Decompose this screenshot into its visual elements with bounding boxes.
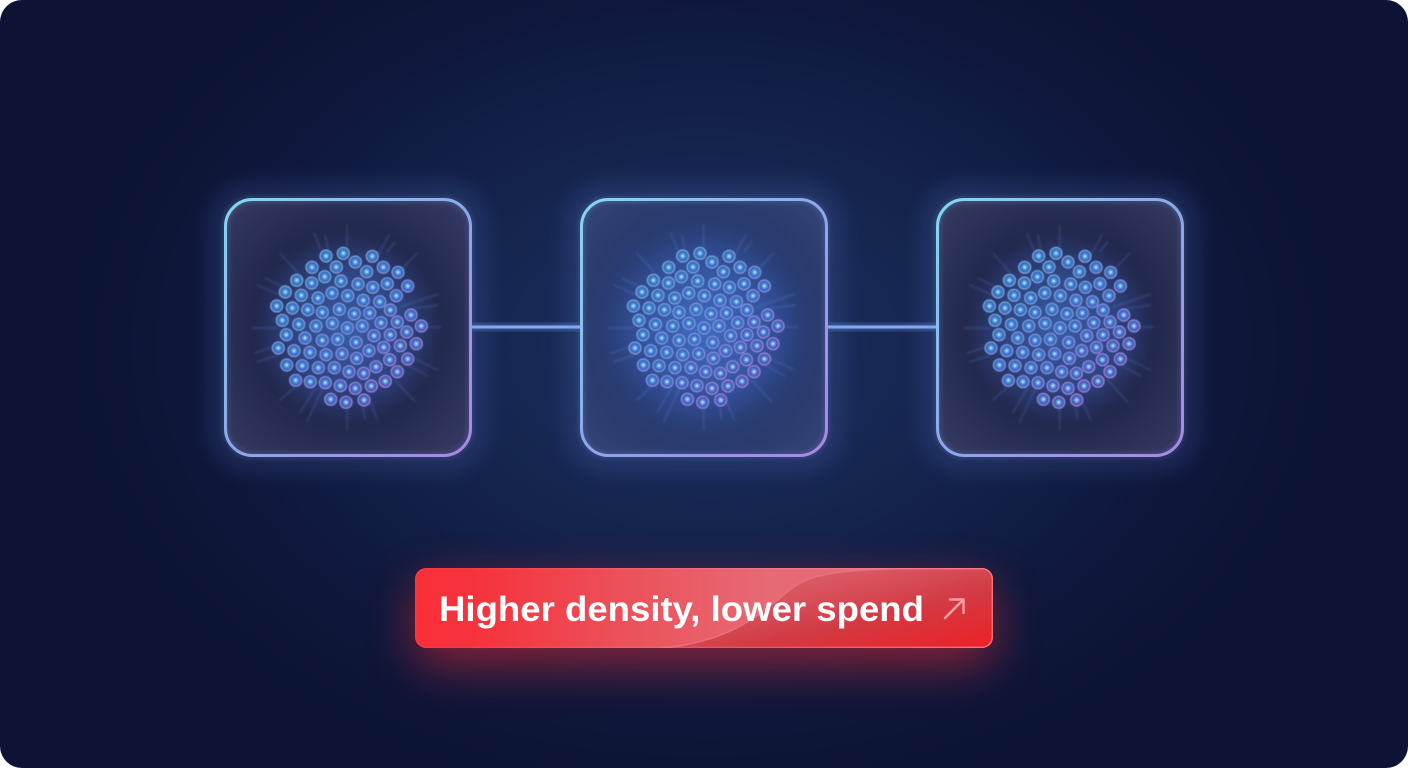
callout glow <box>415 585 993 665</box>
connector: panel 1 to panel 2 <box>472 324 580 330</box>
panel: cluster 2 <box>574 192 834 463</box>
panel: cluster 3 <box>930 192 1190 463</box>
icon: up-right arrow <box>945 600 964 618</box>
connector: panel 2 to panel 3 <box>828 324 936 330</box>
callout text: Higher density, lower spend <box>439 590 924 629</box>
panel: cluster 1 <box>218 192 478 463</box>
callout button <box>415 568 1000 649</box>
